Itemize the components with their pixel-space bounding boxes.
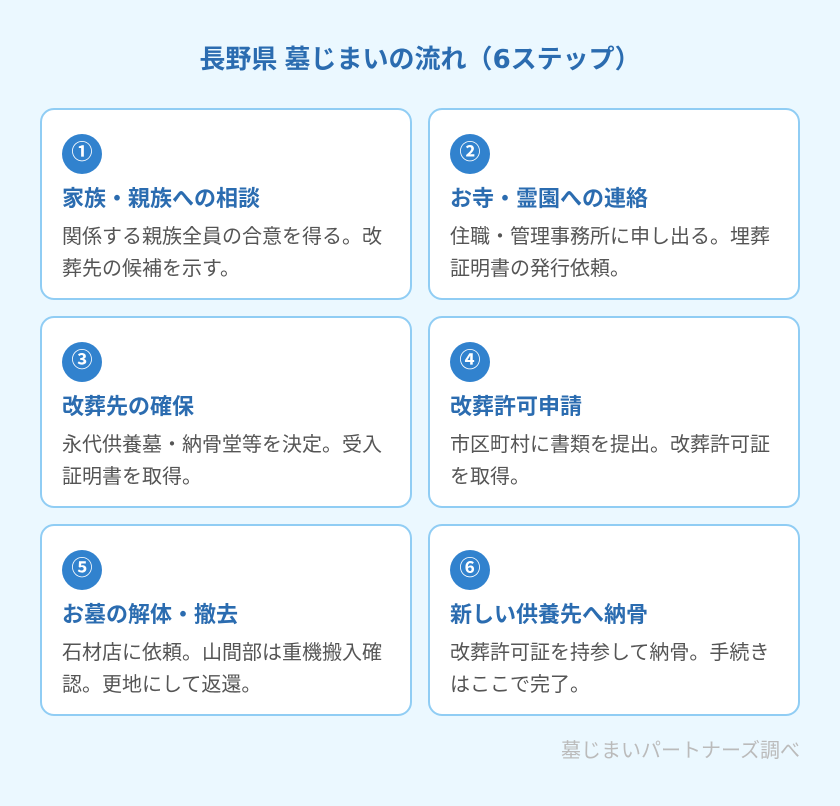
step 4 number badge xyxy=(450,342,490,382)
step 1 number badge: ① xyxy=(72,141,92,164)
step 3 number badge xyxy=(62,342,102,382)
step 6 heading: 新しい供養先へ納骨 xyxy=(450,602,648,627)
step 6 number badge: ⑥ xyxy=(460,557,480,580)
step 5 heading: お墓の解体・撤去 xyxy=(62,602,238,627)
step 2 text: 住職・管理事務所に申し出る。埋葬証明書の発行依頼。 xyxy=(450,226,770,280)
panel: step 6 xyxy=(428,524,800,716)
step 4 number badge: ④ xyxy=(460,349,480,372)
step 3 heading: 改葬先の確保 xyxy=(62,394,194,419)
step 5 number badge xyxy=(62,550,102,590)
step 1 number badge xyxy=(62,134,102,174)
panel: step 1 xyxy=(40,108,412,300)
step 4 text: 市区町村に書類を提出。改葬許可証を取得。 xyxy=(450,434,770,488)
title: 長野県 墓じまいの流れ（6ステップ） xyxy=(199,44,641,75)
step 4 heading: 改葬許可申請 xyxy=(450,394,582,419)
panel: step 2 xyxy=(428,108,800,300)
step 2 number badge xyxy=(450,134,490,174)
step 5 number badge: ⑤ xyxy=(72,557,92,580)
step 5 text: 石材店に依頼。山間部は重機搬入確認。更地にして返還。 xyxy=(62,642,382,696)
step 3 text: 永代供養墓・納骨堂等を決定。受入証明書を取得。 xyxy=(62,434,382,488)
step 6 number badge xyxy=(450,550,490,590)
step 3 number badge: ③ xyxy=(72,349,92,372)
step 6 text: 改葬許可証を持参して納骨。手続きはここで完了。 xyxy=(450,642,769,696)
panel: step 5 xyxy=(40,524,412,716)
step 2 heading: お寺・霊園への連絡 xyxy=(450,186,648,211)
step 1 heading: 家族・親族への相談 xyxy=(62,186,260,211)
source note: 墓じまいパートナーズ調べ xyxy=(561,740,800,762)
step 2 number badge: ② xyxy=(460,141,480,164)
step 1 text: 関係する親族全員の合意を得る。改葬先の候補を示す。 xyxy=(62,226,382,280)
panel: step 3 xyxy=(40,316,412,508)
panel: step 4 xyxy=(428,316,800,508)
